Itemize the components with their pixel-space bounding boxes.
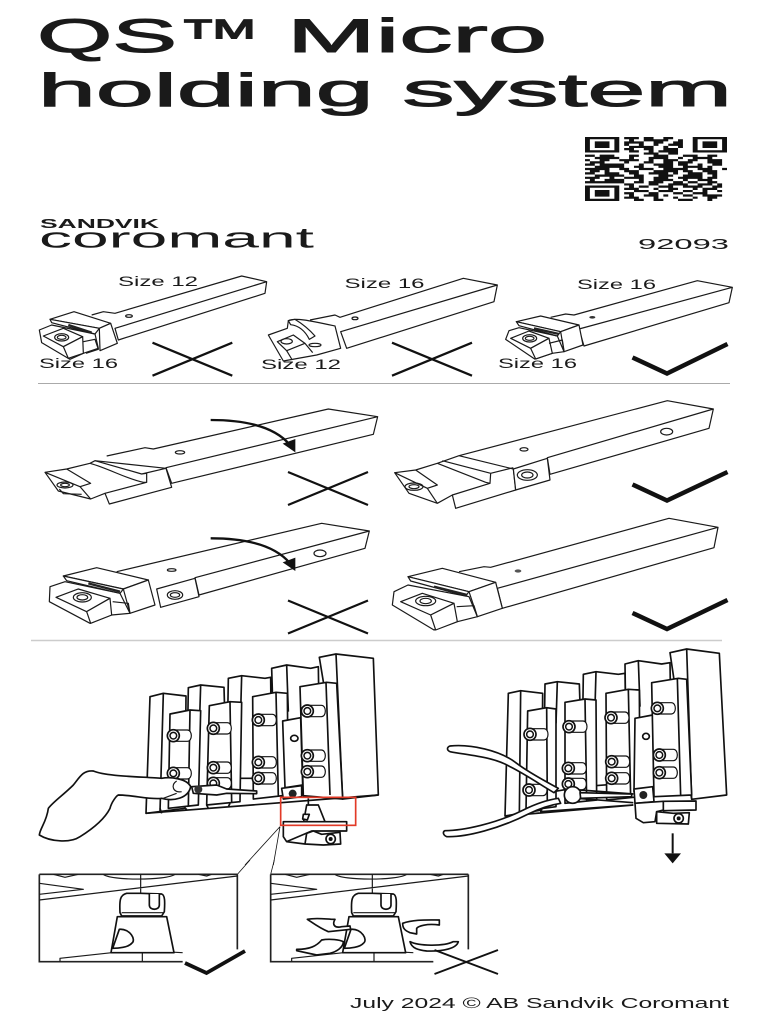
cross mark [288, 600, 368, 634]
tool: wrong orientation, with rear screw [49, 523, 369, 623]
cross mark [392, 343, 472, 376]
tool: correct orientation, top view [395, 401, 713, 508]
document number: 92093 [638, 236, 729, 253]
clamp block and lower tool [282, 786, 347, 845]
callout lines [245, 827, 280, 865]
clamp block and lower tool [634, 787, 696, 824]
logo: Sandvik Coromant: SANDVIK [40, 217, 159, 231]
tool: correct orientation, side view [392, 518, 718, 630]
check mark [632, 600, 728, 629]
screws [523, 702, 677, 796]
label: Size 16: Size 16 [577, 277, 656, 292]
label: Size 12: Size 12 [118, 274, 198, 289]
title: Micro [287, 9, 547, 62]
cross mark [434, 950, 498, 974]
check mark [632, 344, 728, 374]
title: QS [37, 9, 177, 62]
panel: detail wrong [271, 874, 468, 962]
detail background structure [39, 874, 237, 962]
panel: detail correct [39, 860, 274, 962]
cross mark [152, 343, 232, 376]
footer text: July 2024 © AB Sandvik Coromant [350, 996, 729, 1012]
label: Size 16: Size 16 [498, 356, 577, 371]
label: Size 12: Size 12 [261, 357, 341, 372]
tool: wrong orientation, top view [45, 409, 378, 504]
detail frame [271, 874, 468, 962]
QR code [585, 137, 727, 201]
tool: size 12 holder, size 16 head [39, 276, 267, 359]
title [37, 9, 732, 116]
icon: hand with hex key [39, 771, 257, 841]
arrow: rotation [211, 538, 295, 571]
tool: matching size 16 [506, 281, 732, 359]
logo: Sandvik Coromant: coromant [39, 222, 314, 254]
icon: pliers [443, 746, 632, 837]
front blocks [505, 678, 692, 816]
cross mark [288, 472, 368, 505]
callout: red highlight [281, 797, 356, 825]
logo: Sandvik Coromant [39, 217, 314, 254]
back columns [505, 649, 727, 816]
back columns [146, 654, 378, 813]
detail background structure [271, 874, 468, 962]
panel: orientation row [45, 401, 727, 634]
front blocks [146, 682, 378, 813]
detail frame [39, 874, 237, 962]
panel: turret with pliers [443, 649, 727, 863]
screws [167, 705, 325, 789]
retaining pin body [111, 893, 174, 953]
label: Size 16: Size 16 [39, 356, 118, 371]
check mark [185, 951, 245, 973]
title: holding system [38, 64, 732, 116]
check mark [632, 472, 728, 500]
panel: size matching row [39, 274, 732, 376]
panel: turret with hand tool [39, 654, 378, 865]
retaining pin body [343, 893, 406, 953]
arrow: rotation [211, 420, 295, 452]
broken ring fragments [297, 918, 458, 955]
title: ™ [177, 9, 261, 65]
label: Size 16: Size 16 [344, 276, 424, 291]
tool: size 16 holder, size 12 head [268, 278, 497, 361]
arrow: pull down [664, 833, 681, 863]
